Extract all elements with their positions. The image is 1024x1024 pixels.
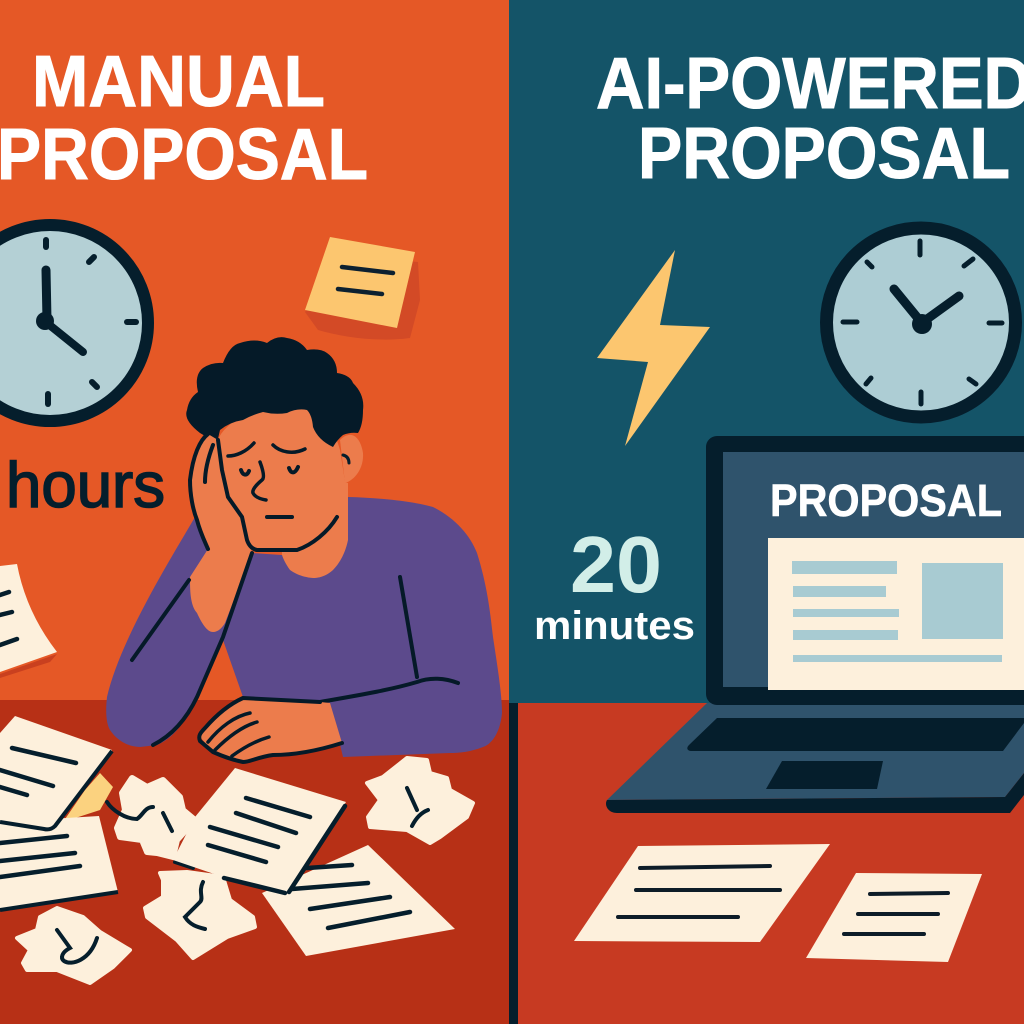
trackpad bbox=[766, 761, 883, 789]
left sleeve bbox=[106, 517, 252, 747]
heading: manual proposal bbox=[0, 42, 368, 195]
ear bbox=[340, 435, 363, 483]
panel: manual background bbox=[0, 0, 509, 700]
hair bbox=[186, 337, 363, 447]
resting hand bbox=[200, 698, 342, 762]
paper: bottom left bbox=[0, 816, 118, 910]
paper: center bbox=[173, 768, 346, 893]
label: 20 minutes: minutes bbox=[534, 604, 695, 648]
laptop screen frame bbox=[706, 436, 1024, 705]
base front edge bbox=[606, 773, 1024, 813]
brows, eyes, nose and mouth bbox=[228, 443, 305, 517]
screen title: PROPOSAL bbox=[770, 475, 1002, 526]
icon: AI clock bbox=[826, 228, 1016, 417]
icon: lightning bolt bbox=[597, 250, 710, 446]
panel: manual desk bbox=[0, 700, 509, 1024]
paper: right lower bbox=[262, 845, 455, 956]
papers: AI desk bbox=[574, 844, 982, 962]
keyboard bbox=[687, 718, 1024, 751]
document on screen bbox=[768, 538, 1024, 690]
face bbox=[218, 404, 348, 550]
crumpled paper: upper middle bbox=[107, 778, 195, 868]
paper: top left bbox=[0, 716, 112, 829]
paper bbox=[806, 873, 982, 962]
paper bbox=[574, 844, 830, 942]
hand on cheek bbox=[190, 434, 252, 632]
crumpled paper: bottom left bbox=[17, 908, 130, 983]
neck bbox=[282, 480, 348, 578]
label: 20 minutes bbox=[534, 520, 695, 648]
icon: laptop bbox=[606, 436, 1024, 813]
panel: AI desk bbox=[509, 703, 1024, 1024]
icon: manual clock bbox=[0, 225, 148, 421]
label: 20 minutes: 20 bbox=[570, 520, 662, 609]
crumpled paper: right bbox=[367, 758, 473, 843]
center divider bbox=[509, 703, 518, 1024]
outlines bbox=[132, 434, 458, 745]
heading: AI-powered proposal bbox=[596, 44, 1024, 194]
panel: AI background bbox=[509, 0, 1024, 703]
heading: manual proposal: MANUAL bbox=[32, 42, 325, 122]
label: hours: hours bbox=[6, 449, 165, 521]
crumpled paper: bottom middle bbox=[145, 872, 255, 958]
heading: manual proposal: PROPOSAL bbox=[0, 115, 368, 195]
paper: under stack yellow bbox=[63, 773, 113, 822]
loose paper: left bbox=[0, 564, 57, 678]
sweater body bbox=[223, 497, 502, 757]
document lines bbox=[792, 561, 1003, 662]
icon: sticky note bbox=[305, 237, 420, 340]
figure: stressed person bbox=[106, 337, 502, 762]
laptop base bbox=[607, 703, 1024, 800]
laptop screen bbox=[723, 452, 1024, 687]
papers: manual desk scatter bbox=[0, 716, 473, 983]
